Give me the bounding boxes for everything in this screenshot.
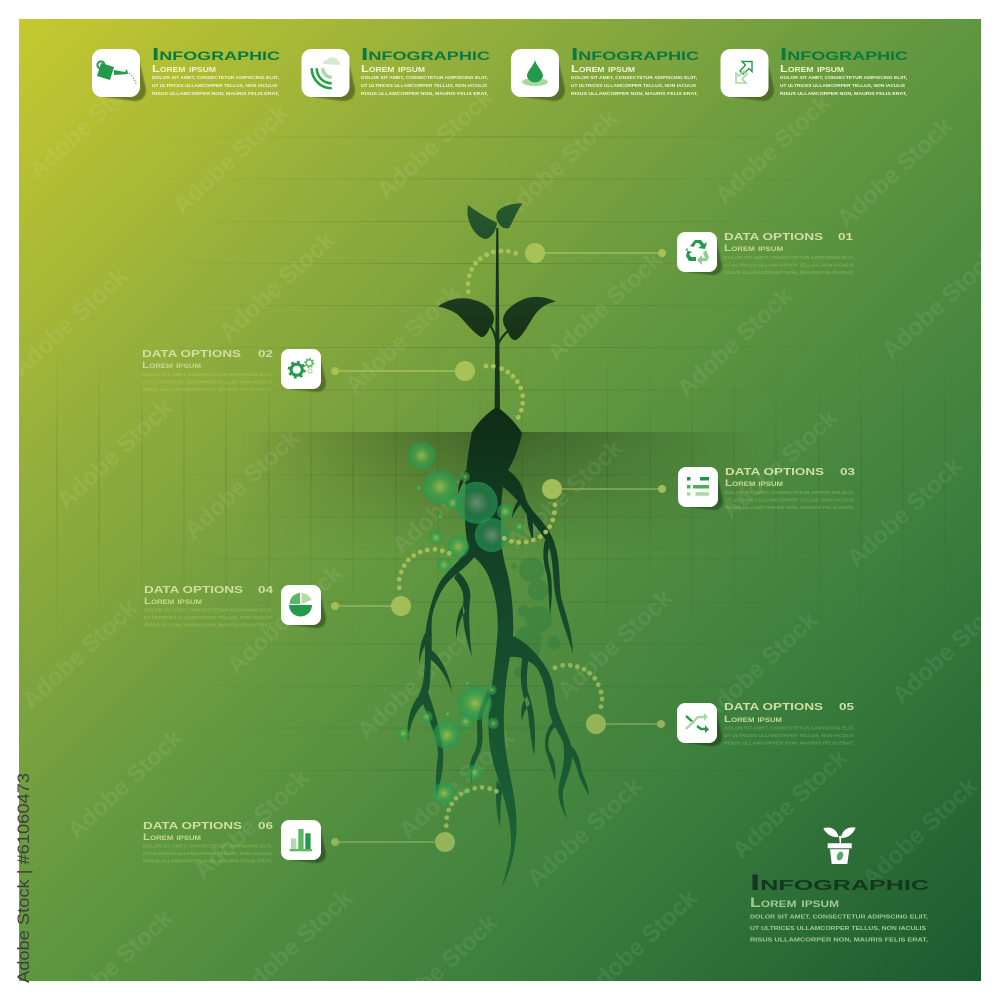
body text: UT ULTRICES ULLAMCORPER TELLUS, NON IACULIS	[725, 498, 854, 502]
watermarks: Adobe Stock	[717, 404, 843, 524]
body text: DOLOR SIT AMET, CONSECTETUR ADIPISCING ELIIT,	[152, 75, 279, 80]
body text: RISUS ULLAMCORPER NON, MAURIS FELIS ERAT,	[143, 858, 272, 864]
side credit text: Adobe Stock | #61060473	[14, 773, 33, 983]
watermarks: Adobe Stock	[340, 279, 466, 399]
number: 06	[258, 821, 274, 832]
subheading: Lorem ipsum	[144, 596, 202, 606]
icon: diagonal arrows	[720, 49, 774, 101]
body text	[361, 75, 488, 96]
data option 06	[143, 820, 326, 864]
ground shadow band	[274, 432, 718, 534]
watermarks: Adobe Stock	[672, 282, 798, 402]
body text: DOLOR SIT AMET, CONSECTETUR ADIPISCING ELIT,	[724, 726, 854, 730]
heading: DATA OPTIONS	[144, 585, 243, 596]
icon: bar chart	[281, 820, 326, 863]
header block 2	[302, 44, 490, 101]
body text	[152, 75, 279, 96]
body text: RISUS ULLAMCORPER NON, MAURIS FELIS ERAT,	[780, 91, 907, 96]
body text: DOLOR SIT AMET, CONSECTETUR ADIPISCING ELIIT,	[750, 914, 929, 920]
subheading: Lorem ipsum	[724, 714, 782, 724]
body text: DOLOR SIT AMET, CONSECTETUR ADIPISCING ELIIT,	[361, 75, 488, 80]
heading: DATA OPTIONS	[724, 702, 823, 713]
body text: UT ULTRICES ULLAMCORPER TELLUS, NON IACULIS	[750, 926, 926, 932]
body text: UT ULTRICES ULLAMCORPER TELLUS, NON IACULIS	[780, 83, 905, 88]
watermarks: Adobe Stock	[727, 744, 853, 864]
subheading: Lorem ipsum	[725, 478, 783, 488]
body text	[143, 844, 272, 864]
watermarks: Adobe Stock	[372, 84, 498, 204]
side rootlets	[419, 470, 589, 827]
watermarks: Adobe Stock	[24, 64, 150, 184]
heading: Infographic	[750, 870, 929, 895]
watermarks: Adobe Stock	[222, 559, 348, 679]
petioles	[490, 325, 509, 345]
heading: DATA OPTIONS	[724, 232, 823, 243]
subheading: Lorem ipsum	[152, 63, 216, 75]
middle leaves	[438, 297, 556, 340]
body text: UT ULTRICES ULLAMCORPER TELLUS, NON IACULIS	[143, 851, 272, 856]
icon: pie chart	[281, 585, 326, 628]
data option 02	[142, 349, 326, 392]
icon: water drop	[511, 49, 565, 101]
data option 05	[677, 702, 855, 746]
watermarks: Adobe Stock	[877, 244, 1000, 364]
watermarks: Adobe Stock	[387, 439, 513, 559]
body text	[725, 490, 854, 510]
heading: DATA OPTIONS	[142, 349, 241, 360]
heading: Infographic	[571, 44, 699, 64]
subheading: Lorem ipsum	[571, 63, 635, 75]
number: 03	[840, 467, 856, 478]
watermarks: Adobe Stock	[62, 724, 188, 844]
glowing bubbles	[397, 442, 524, 804]
subheading: Lorem ipsum	[361, 63, 425, 75]
watermarks: Adobe Stock	[179, 424, 305, 544]
body text: UT ULTRICES ULLAMCORPER TELLUS, NON IACULIS	[144, 615, 272, 620]
body text	[780, 75, 907, 96]
subheading: Lorem ipsum	[750, 895, 839, 910]
data option 03	[678, 467, 856, 510]
watermarks: Adobe Stock	[697, 606, 823, 726]
data option 04	[144, 585, 326, 628]
icon: recycle	[677, 232, 722, 275]
icon: shuffle	[677, 703, 722, 746]
body text: DOLOR SIT AMET, CONSECTETUR ADIPISCING ELIT,	[143, 844, 272, 848]
body text: DOLOR SIT AMET, CONSECTETUR ADIPISCING ELIIT,	[571, 75, 697, 80]
icon: list	[678, 467, 723, 510]
watermarks: Adobe Stock	[394, 724, 520, 844]
body text: RISUS ULLAMCORPER NON, MAURIS FELIS ERAT,	[152, 91, 279, 96]
body text: RISUS ULLAMCORPER NON, MAURIS FELIS ERAT,	[361, 91, 488, 96]
body text: UT ULTRICES ULLAMCORPER TELLUS, NON IACULIS	[571, 83, 696, 88]
bottom right block	[750, 827, 929, 944]
body text: DOLOR SIT AMET, CONSECTETUR ADIPISCING ELIT,	[725, 490, 854, 495]
watermarks: Adobe Stock	[17, 594, 143, 714]
subheading: Lorem ipsum	[143, 832, 201, 842]
watermarks: Adobe Stock	[214, 226, 340, 346]
watermarks: Adobe Stock	[168, 99, 294, 219]
icon: gears	[281, 349, 326, 392]
grid lines	[57, 137, 945, 770]
watermarks: Adobe Stock	[857, 772, 983, 892]
watermarks: Adobe Stock	[52, 394, 178, 514]
body text	[724, 726, 854, 746]
heading: Infographic	[152, 44, 280, 64]
watermarks: Adobe Stock	[842, 452, 968, 572]
body text	[142, 372, 272, 392]
body text: UT ULTRICES ULLAMCORPER TELLUS, NON IACULIS	[724, 262, 854, 268]
number: 04	[258, 585, 274, 596]
body text: UT ULTRICES ULLAMCORPER TELLUS, NON IACULIS	[361, 83, 487, 88]
icon: watering can	[92, 49, 146, 101]
body text: RISUS ULLAMCORPER NON, MAURIS FELIS ERAT,	[750, 938, 929, 944]
heading: DATA OPTIONS	[143, 821, 242, 832]
header block 4	[720, 44, 908, 101]
body text: RISUS ULLAMCORPER NON, MAURIS FELIS ERAT,	[144, 622, 272, 628]
body text	[724, 255, 854, 275]
body text: DOLOR SIT AMET, CONSECTETUR ADIPISCING ELIT,	[142, 372, 272, 377]
body text: UT ULTRICES ULLAMCORPER TELLUS, NON IACULIS	[724, 733, 854, 738]
watermarks: Adobe Stock	[352, 624, 478, 744]
watermarks: Adobe Stock	[832, 112, 958, 232]
icon: potted plant	[823, 827, 856, 864]
watermarks: Adobe Stock	[502, 434, 628, 554]
body text: RISUS ULLAMCORPER NON, MAURIS FELIS ERAT,	[571, 91, 698, 96]
watermarks: Adobe Stock	[542, 246, 668, 366]
soft bubbles behind roots	[511, 558, 560, 678]
heading: Infographic	[361, 44, 490, 64]
watermarks: Adobe Stock	[7, 262, 133, 382]
connector 01	[466, 243, 666, 294]
connector 03	[502, 479, 666, 545]
subheading: Lorem ipsum	[724, 243, 783, 253]
body text: DOLOR SIT AMET, CONSECTETUR ADIPISCING ELIIT,	[780, 75, 907, 80]
body text	[571, 75, 698, 96]
watermarks: Adobe Stock	[522, 772, 648, 892]
connector 02	[331, 361, 525, 420]
connector 06	[331, 785, 499, 852]
watermarks: Adobe Stock	[497, 104, 623, 224]
header block 3	[511, 44, 699, 101]
plant	[407, 203, 589, 887]
heading: Infographic	[780, 44, 908, 64]
subheading: Lorem ipsum	[142, 360, 201, 370]
body text	[750, 914, 929, 944]
subheading: Lorem ipsum	[780, 63, 844, 75]
watermarks: Adobe Stock	[189, 764, 315, 884]
stem	[495, 228, 500, 410]
top leaves	[467, 203, 522, 239]
heading: DATA OPTIONS	[725, 467, 824, 478]
icon: signal and cloud	[302, 49, 355, 101]
header block 1	[92, 44, 280, 101]
number: 05	[839, 702, 855, 713]
number: 02	[258, 349, 274, 360]
number: 01	[838, 232, 854, 243]
connector 05	[553, 663, 665, 734]
body text	[144, 608, 272, 628]
body text: RISUS ULLAMCORPER NON, MAURIS FELIS ERAT,	[725, 505, 854, 510]
body text: RISUS ULLAMCORPER NON, MAURIS FELIS ERAT,	[724, 270, 854, 275]
body text: RISUS ULLAMCORPER NON, MAURIS FELIS ERAT,	[142, 387, 272, 392]
body text: UT ULTRICES ULLAMCORPER TELLUS, NON IACULIS	[142, 380, 272, 384]
body text: DOLOR SIT AMET, CONSECTETUR ADIPISCING ELIT,	[144, 608, 272, 612]
watermarks: Adobe Stock	[552, 584, 678, 704]
trunk and main roots	[407, 407, 573, 887]
data option 01	[677, 232, 854, 275]
body text: UT ULTRICES ULLAMCORPER TELLUS, NON IACULIS	[152, 83, 277, 88]
connector 04	[331, 547, 452, 616]
watermarks: Adobe Stock	[710, 89, 836, 209]
body text: DOLOR SIT AMET, CONSECTETUR ADIPISBING ELIT,	[724, 255, 854, 260]
body text: RISUS ULLAMCORPER NON, MAURIS FELIS ERAT,	[724, 740, 854, 746]
